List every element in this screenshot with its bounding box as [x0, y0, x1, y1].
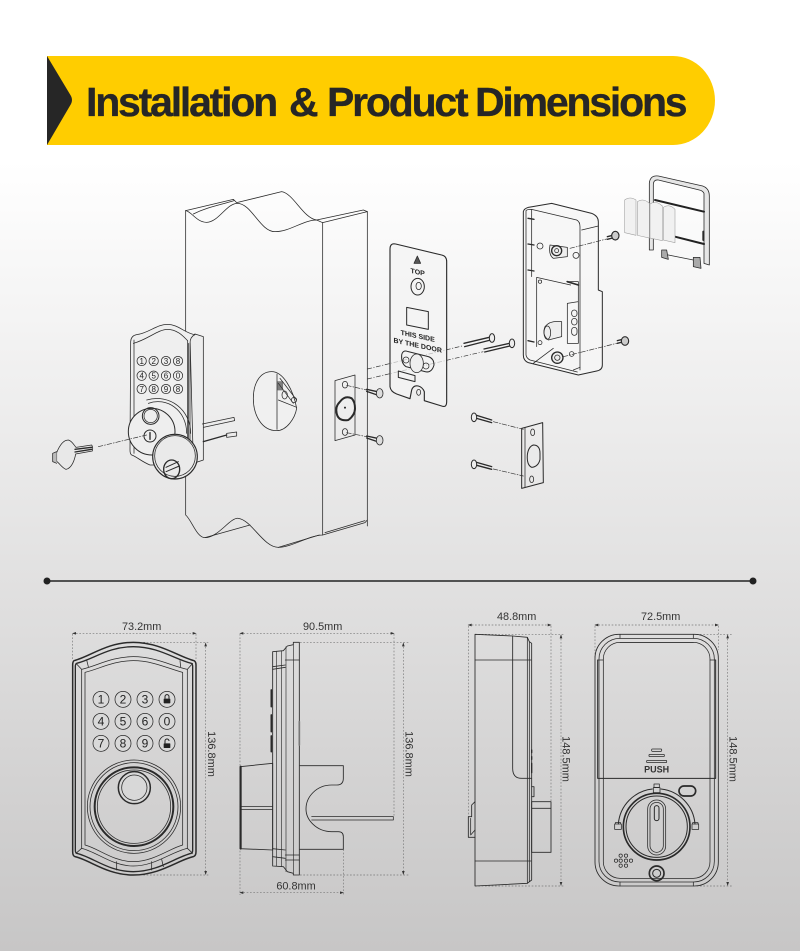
keypad digits: 6: [164, 372, 169, 381]
icon: lock: [164, 695, 170, 703]
thumb turn knob: [153, 434, 197, 479]
keypad digits: 3: [142, 693, 149, 707]
screws into faceplate: [347, 385, 383, 445]
keypad digits: 3: [164, 357, 169, 366]
keypad digits: 5: [120, 715, 127, 729]
exploded diagram: door and outside lock: [53, 192, 383, 547]
keypad digits: 4: [98, 715, 105, 729]
title: Installation: [86, 79, 285, 125]
side view of keypad lock: [240, 642, 393, 875]
keypad digits: 1: [139, 357, 144, 366]
label: 72.5mm: 72.5mm: [641, 611, 680, 623]
plate text: THIS SIDE BY THE DOOR: THIS SIDE: [401, 330, 435, 344]
long mounting screws: [464, 334, 515, 352]
keypad digits: [139, 357, 181, 394]
keypad lock exterior: [128, 324, 203, 465]
front view of interior assembly: [595, 634, 718, 886]
keypad digits: 7: [98, 737, 105, 751]
front view dimension marks: [594, 624, 732, 886]
battery cover: [649, 176, 709, 268]
keypad digits: 9: [164, 385, 169, 394]
title: Dimensions: [475, 79, 687, 125]
side view of interior assembly: [468, 634, 551, 886]
label: 48.8mm: 48.8mm: [497, 611, 536, 623]
label: 136.8mm side: 136.8mm: [403, 731, 415, 777]
keypad digits: 2: [120, 693, 127, 707]
strike plate: [522, 423, 543, 488]
mounting plate: [390, 244, 447, 406]
icon: unlock: [164, 739, 170, 748]
exploded diagram: interior assembly: [367, 176, 709, 488]
keypad digits: [98, 693, 171, 751]
keypad digits: 1: [98, 693, 105, 707]
keypad digits: 8: [151, 385, 156, 394]
latch faceplate: [335, 375, 355, 441]
batteries: [625, 198, 675, 243]
label: 136.8mm front: 136.8mm: [205, 731, 217, 777]
door slab: [186, 192, 367, 547]
icon: banner arrow: [47, 56, 72, 145]
keypad digits: 0: [176, 372, 181, 381]
door bore hole: [253, 372, 297, 431]
side view dimension marks: [468, 624, 565, 886]
front view of keypad lock: [73, 642, 196, 875]
label: 60.8mm: 60.8mm: [276, 880, 316, 892]
label: 148.5mm side: 148.5mm: [560, 736, 572, 782]
title banner: [47, 56, 715, 145]
keypad digits: 8: [120, 737, 127, 751]
label: 73.2mm: 73.2mm: [122, 621, 161, 633]
keypad digits: 6: [142, 715, 149, 729]
plate text: THIS SIDE BY THE DOOR: BY THE DOOR: [393, 338, 442, 355]
strike plate screws: [471, 413, 523, 476]
dimensions: interior assembly: [468, 611, 738, 886]
keypad digits: 9: [142, 737, 149, 751]
divider line: [44, 578, 756, 584]
keypad digits: 0: [164, 715, 171, 729]
plate text: TOP: TOP: [411, 268, 425, 278]
keypad digits: 7: [139, 385, 144, 394]
keypad digits: 8: [176, 385, 181, 394]
side view dimension marks: [239, 632, 408, 895]
label: PUSH: PUSH: [644, 765, 669, 775]
cables: [202, 417, 237, 442]
title: Product: [327, 79, 476, 125]
front view dimension marks: [72, 632, 210, 875]
guide lines from door: [367, 346, 483, 379]
label: 148.5mm front: 148.5mm: [726, 736, 738, 782]
keypad digits: 4: [139, 372, 144, 381]
dimensions: front and side of keypad lock: [72, 621, 415, 895]
keypad digits: 5: [151, 372, 156, 381]
lock housing: [523, 203, 602, 375]
keypad digits: 8: [176, 357, 181, 366]
title: &: [289, 79, 326, 125]
housing screws: [563, 231, 629, 357]
keypad digits: 2: [151, 357, 156, 366]
label: 90.5mm: 90.5mm: [303, 621, 342, 633]
key: [53, 435, 147, 469]
